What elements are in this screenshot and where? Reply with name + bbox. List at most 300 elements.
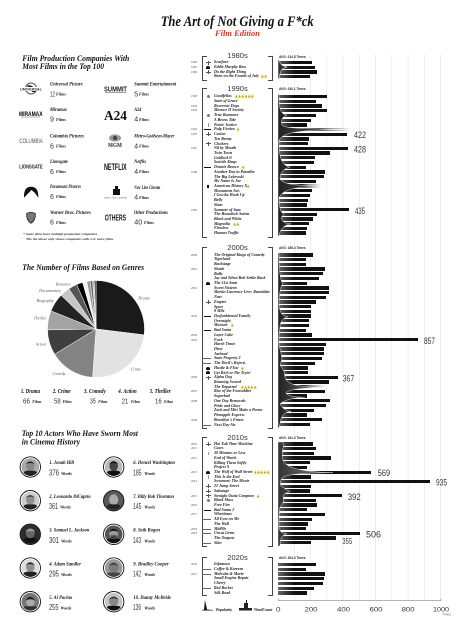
film list: 2000s: Shade [214,266,224,271]
company: A24: A24 [104,109,127,124]
film list: 1990s: 1995 [191,132,197,136]
film list: 1990s [191,93,255,235]
company: Paramount: Paramount Pictures [50,185,81,190]
company: Summit: Summit Entertainment [134,82,177,88]
company: Lionsgate: LIONSGATE [19,164,43,170]
film list: 2000s: Sweet Sixteen [214,285,237,290]
actor: Denzel Washington: 6. Denzel Washington [133,461,175,466]
film list: 2000s: ▲ [241,366,244,370]
film list: 2000s: Spun [214,304,223,309]
value labels: 857 [424,336,435,346]
film list: 1990s: ▲ [237,127,240,131]
film list: 2000s: Superbad [214,393,230,398]
actor: Danny McBride: 10. Danny McBride [133,596,172,601]
film list: 2010s: All Eyez on Me [214,516,239,521]
film list: 1990s: 1992 [191,104,197,108]
film list: 1990s: Goodfellas [214,93,232,98]
film list: 2010s: ▲▲▲▲▲ [254,470,270,474]
film list: 1990s: Pulp Fiction [214,126,235,131]
actor: Billy Bob Thornton [104,490,174,511]
film list: 2010s: Killing Them Softly [214,460,246,464]
actor: Jonah Hill [20,457,75,478]
genre legend: Films [32,400,42,404]
average: 2010s: AVG: 191.4 Times [279,436,306,440]
company: Paramount [24,185,81,201]
actor: Leonardo DiCaprio [20,490,91,511]
company: Others: Films [144,220,154,225]
company: A24 [104,108,149,124]
actor: Adam Sandler: 4. Adam Sandler [48,562,81,568]
actor: Danny McBride: Words [144,606,156,611]
film list: 1990s: Nil by Mouth [214,145,236,150]
genre legend: 66 [23,398,30,406]
genre legend: Films [131,400,141,404]
film list: 1980s: Do the Right Thing [214,69,246,74]
heading: actors: Top 10 Actors Who Have Sworn Most [22,429,139,438]
film list: 2000s: Martin Lawrence Live: Runteldat [214,289,269,294]
film list: 1980s: Born on the Fourth of July [214,73,259,78]
company: A24: 4 [134,117,138,124]
panel: 2010s [191,433,430,547]
genre legend: 1. Drama [21,389,40,395]
bars: 2010s [279,442,430,544]
film list: 2000s: Monster [214,322,228,327]
film list: 1990s: My Name Is Joe [214,178,241,183]
film list: 2020s [191,561,249,595]
company: Universal: Films [56,92,66,96]
film list: 1980s: 1989 [191,70,197,74]
film list: 2010s: Project X [214,464,229,469]
film list: 1990s: Black and White [214,216,242,221]
film list: 1990s: Summer of Sam [214,207,241,212]
film list: 1990s: ▲▲ [233,222,240,226]
company: MGM [108,134,174,150]
film list: 2020s: Infamous [214,561,230,566]
film list: 2000s: 2007 [191,389,197,393]
film list: 2000s: Harsh Times [214,341,235,346]
actor: Billy Bob Thornton: 145 [133,501,142,511]
film list: 1990s: ▲ [242,165,245,169]
film list: 1990s: Slam [214,202,222,207]
company: A24: A24 [133,108,142,113]
film list: 1990s: 1990 [191,94,197,98]
film list: 2010s: Skin [214,540,222,545]
film list: 2000s: Get Rich or Die Tryin' [214,370,251,375]
film list: 2000s: Jay and Silent Bob Strike Back [214,275,265,280]
film list: 2000s: Hustle & Flow [214,365,238,370]
panel: production companies [19,54,177,241]
film list: 2000s [191,252,270,427]
average: 1980s: AVG: 214.5 Times [279,55,306,59]
heading: 1980s: 1980s [227,51,248,60]
company: Miramax: 9 [50,117,54,124]
panel: genres pie chart [20,263,174,406]
pie chart [47,280,145,377]
heading: actors: in Cinema History [22,438,80,446]
film list: 1990s: Clockers [214,141,228,146]
film list: 2010s: 30 Minutes or Less [214,450,245,455]
film list: 2000s: 8 Mile [214,308,225,313]
company: Lionsgate [19,160,69,176]
film list: 2010s: Free Fire [214,502,230,507]
company: Netflix [104,160,149,176]
film list: 1990s: 1999 [191,208,197,212]
film list: 2000s: 2002 [191,286,197,290]
film list: 2020s: 2021 [191,572,197,576]
film list: 2020s: Cherry [214,580,226,585]
film list: 2000s: 2001 [191,267,197,271]
heading: genres: The Number of Films Based on Genres [22,263,144,272]
footnote [23,232,114,241]
company: MGM: MGM [108,143,122,149]
company: Netflix: NETFLIX [104,162,127,173]
company: New Line: New Line Cinema [134,186,161,191]
pie labels: Action [34,342,46,346]
film list: 1980s: ▲▲ [261,74,267,78]
film list: 1990s: Magnolia [214,221,230,226]
actor: Jonah Hill: 1. Jonah Hill [49,461,75,466]
film list: 2000s: Dirty [214,346,222,351]
actor: Bradley Cooper [104,558,169,578]
film list: 2000s: Rise of the Footsoldier [214,388,251,393]
company: Miramax: Miramax [49,108,67,113]
company: Summit: 5 [134,91,138,98]
film list: 2000s: 2005 [191,338,197,342]
genre legend: 5. Thriller [150,389,171,395]
actor: Jonah Hill: Words [61,471,72,476]
bars: 2020s [278,563,325,595]
film list: 2000s: Next Day Air [214,422,236,426]
bars: 2000s [278,253,418,426]
film list: 1990s: Casino [214,131,226,136]
popularity: 1990s [278,94,349,236]
x axis: 800 [402,606,415,614]
x axis: 0 [276,606,281,614]
company: Columbia: Columbia Pictures [50,134,84,140]
film list: 2000s: Overnight [214,318,231,323]
pie labels: Drama [137,296,150,300]
x axis: Times [442,612,451,616]
actor: Adam Sandler: 295 [49,568,59,578]
actor: Seth Rogen: Words [144,538,156,543]
film list: 2010s: 2016 [191,503,197,507]
company: Warner Bros [27,211,91,227]
actor: Leonardo DiCaprio: Words [60,505,71,510]
film list: 2000s: The 51st State [214,280,237,285]
heading: 1990s: 1990s [227,84,248,93]
film list: 2010s: Wheelman [214,511,232,516]
heading: actors [22,429,139,446]
panel: top 10 actors [20,429,175,612]
film list: 2010s: The Outpost [214,535,234,540]
film list: 2010s: 2013 [191,470,197,474]
actor: Samuel L. Jackson: 301 [49,535,59,545]
film list: 1980s: Eddie Murphy Raw [214,64,246,69]
film list: 1990s: Reservoir Dogs [214,103,239,108]
title: Film Edition [214,29,261,38]
genre legend: Films [98,400,108,404]
heading: production companies [21,54,130,71]
film list: 2000s: 2008 [191,399,197,403]
film list: 2010s: Cases [214,445,224,450]
film list: 2000s: ▲ [231,323,234,327]
actor: Samuel L. Jackson [20,524,89,545]
company: Universal: 12 [50,91,55,98]
popularity: 2010s [278,442,333,546]
film list: 2000s: One Day Removals [214,398,246,403]
company: Universal: Universal Picture [50,82,83,88]
film list: 2000s: Narc [214,294,222,299]
film list: 1990s: Belly [214,197,222,202]
film list: 1990s: 1994 [191,127,197,131]
actor: Danny McBride: 136 [133,602,141,612]
genre legend: 35 [90,398,96,406]
panel: 1990s [191,84,350,238]
film list: 1990s: The Big Lebowski [214,174,244,179]
film list: 2010s: End of Watch [214,455,237,460]
actor: Bradley Cooper: 142 [133,568,141,578]
film list: 2000s: Dysfunktional Family [214,313,250,318]
genre legend: 3. Comedy [83,389,106,395]
popularity: 2000s [278,253,323,428]
heading: production companies: Most Films in the Top 100 [21,62,104,71]
genre legend: 4. Action [117,389,137,395]
film list: 2010s: 22 Jump Street [214,483,239,488]
company: Warner Bros: 6 [50,220,54,227]
film list: 2010s: 2010 [191,442,197,446]
value labels: 392 [348,492,361,502]
film list: 2020s: Small Engine Repair [214,575,249,580]
film list: 2000s: The Original Kings of Comedy [214,252,265,257]
company: Columbia: Films [56,144,66,149]
company: MGM: 4 [134,143,138,150]
film list: 1990s: Another Day in Paradise [214,169,255,174]
genre legend: 16 [155,398,162,406]
company: MGM: Films [139,144,149,149]
film list: 2000s: The Departed [214,384,237,389]
popularity: 1980s [278,60,287,79]
bars: 1990s [279,95,350,235]
film list: 2010s: 2018 [191,527,197,531]
film list: 2000s: Bad Santa [214,327,231,332]
film list: 2000s: Running Scared [214,379,241,384]
company: Universal [19,82,83,98]
genre legend: 2. Crime [52,389,71,395]
actor: Al Pacino: 255 [49,602,59,612]
film list: 1990s: The Boondock Saints [214,211,249,216]
film list: 2000s: 2009 [191,418,197,422]
company: Lionsgate: 6 [50,169,54,176]
legend: popularity and word count: WordCount [254,607,273,612]
company: Columbia: COLUMBIA [19,138,43,145]
actor: Adam Sandler: Words [61,572,72,577]
film list: 2020s: Malcolm & Marie [214,571,244,576]
film list: 1980s: 1983 [191,60,197,64]
company: Others: Other Productions [134,211,168,216]
value labels: 935 [436,478,447,488]
company: Netflix: 4 [134,169,138,176]
actor: Denzel Washington [104,457,175,478]
film list: 2000s: Brooklyn's Finest [214,417,243,422]
x axis: 200 [304,606,318,614]
actor: Samuel L. Jackson: 3. Samuel L. Jackson [48,528,89,534]
company: Summit: Films [139,92,149,96]
film list: 1990s: ▲ [247,184,250,188]
title: The Art of Not Giving a F*ck [161,14,314,30]
value labels: 506 [366,530,381,540]
film list: 2000s: Fuck [214,337,223,342]
average: 1990s: AVG: 240.1 Times [279,87,306,91]
genre legend: 58 [54,398,61,406]
film list: 2010s: Mid90s [214,526,226,531]
film list: 2010s [191,441,270,545]
company: Netflix: Netflix [133,160,147,165]
company: Lionsgate: Films [56,169,66,174]
genre legend: 21 [122,398,128,406]
bars: 1980s [279,61,317,78]
film list: 2000s: Empire [214,299,226,304]
film list: 1990s: Human Traffic [214,230,239,235]
film list: 2010s: 2014 [191,479,197,483]
pie labels: Documentary [38,288,61,293]
film list: 1990s: Gridlock'd [214,155,232,160]
company: New Line: NEW LINE CINEMA [104,197,128,200]
film list: 2010s: 2015 [191,494,197,498]
value labels: 355 [342,537,353,546]
pie labels: Thriller [34,316,47,320]
company: Paramount: 6 [50,194,54,201]
company: New Line: 4 [134,195,138,202]
heading: production companies: Film Production Companies With [21,54,130,63]
pie labels: Romance [55,282,71,286]
film list: 1990s: Suicide Kings [214,159,237,164]
film list: 2000s: Alpha Dog [214,374,232,379]
pie labels: Comedy [52,371,66,376]
film list: 2010s: Black Mass [214,497,233,502]
actor: Leonardo DiCaprio: 361 [49,501,58,511]
actor: Leonardo DiCaprio: 2. Leonardo DiCaprio [48,495,91,500]
film list: 1990s: 1997 [191,146,197,150]
value labels: 422 [354,130,366,140]
film list: 2020s: Silk Road [214,590,230,595]
film list: 1990s: Donnie Brasco [214,164,239,169]
company: Paramount: Films [56,194,66,199]
film list: 2010s: The Wall [214,521,229,526]
actor: Denzel Washington: Words [144,471,156,476]
film list: 2020s: Red Rocket [214,585,233,590]
film list: 2010s: 2017 [191,512,197,516]
film list: 1980s: 1987 [191,65,197,69]
actor: Denzel Washington: 185 [133,468,142,478]
actor: Adam Sandler [20,558,81,578]
film list: 2010s: ▲ [257,494,260,498]
pie labels: Crime [131,366,141,372]
company: Summit: SUMMIT [104,86,128,94]
company: Lionsgate: Lionsgate [49,160,69,165]
film list: 2000s: ▲▲▲▲▲ [241,385,257,389]
film list: 2000s: 2006 [191,375,197,379]
company: A24: Films [139,117,149,122]
film list: 1990s: Monument Ave. [214,188,240,193]
film list: 2010s: This Is the End [214,474,239,479]
film list: 1990s: Ten Benny [214,136,232,141]
film list: 1990s: A Bronx Tale [214,117,236,122]
film list: 2010s: Swearnet: The Movie [214,478,249,483]
company: Miramax [19,108,67,124]
company: Warner Bros: Warner Bros. Pictures [50,211,91,216]
film list: 2020s: Coffee & Kareem [214,566,243,571]
film list: 1990s: Poetic Justice [214,122,237,127]
company: MGM: Metro-Goldwyn-Mayer [133,134,174,140]
company: Netflix: Films [139,169,149,174]
film list: 2010s: Straight Outta Compton [214,493,254,498]
company: Others: OTHERS [105,213,126,223]
panel: 2000s [191,243,418,429]
actor: Billy Bob Thornton: Words [144,505,156,510]
film list: 2010s: Uncut Gems [214,530,235,535]
film list: 2010s: 2011 [191,446,197,450]
film list: 2010s: Bad Santa 2 [214,507,234,512]
film list: 1990s: American History X [214,183,247,188]
actor: Danny McBride [104,592,172,612]
company: Summit [104,82,177,98]
actor: Seth Rogen: 143 [133,535,141,545]
company: Others [105,211,168,227]
film list: 1990s: I Got the Hook Up [214,192,245,197]
genre legend: Films [164,400,174,404]
value labels: 428 [354,144,366,154]
film list: 2000s: 2000 [191,253,197,257]
film list: 1990s: True Romance [214,112,238,117]
title [161,14,314,38]
film list: 1980s [191,59,267,79]
film list: 2000s: Jarhead [214,351,228,356]
actor: Billy Bob Thornton: 7. Billy Bob Thornton [133,495,174,500]
company: Universal: UNIVERSAL [20,88,43,92]
actor: Bradley Cooper: 9. Bradley Cooper [133,562,169,568]
film list: 2010s: The Wolf of Wall Street [214,469,252,474]
film list: 2010s: Sabotage [214,488,229,493]
actor: Seth Rogen: 8. Seth Rogen [133,528,160,534]
actor: Al Pacino: 5. Al Pacino [49,596,73,601]
pie labels [34,282,150,376]
actor: Jonah Hill: 376 [49,468,59,478]
average: 2020s: AVG: 204.4 Times [279,556,306,560]
actor: Al Pacino [20,592,73,612]
film list: 1990s: State of Grace [214,98,238,103]
average: 2000s: AVG: 156.4 Times [279,246,306,250]
film list: 2000s: Zack and Miri Make a Porno [214,407,262,412]
panel: 1980s [191,51,317,81]
heading: 2020s: 2020s [227,553,248,562]
value labels: 367 [343,374,354,384]
value labels: 569 [378,468,390,478]
actor: Seth Rogen [104,524,160,545]
company: Others: 40 [134,220,142,227]
film list: 2000s: The Devil's Rejects [214,360,246,365]
company: Miramax: MIRAMAX [19,111,43,118]
x axis: 400 [337,606,350,614]
film list: 2000s: Tigerland [214,256,230,261]
panel: 2020s [191,553,325,596]
film list: 2010s: 2019 [191,531,197,535]
heading: 2000s: 2000s [227,243,248,252]
film list: 1990s: Menace II Society [214,107,244,112]
company: New Line [104,186,161,202]
actor: Al Pacino: Words [60,606,72,611]
pie labels: Biography [37,298,54,303]
legend: popularity and word count: Popularity [216,607,232,612]
